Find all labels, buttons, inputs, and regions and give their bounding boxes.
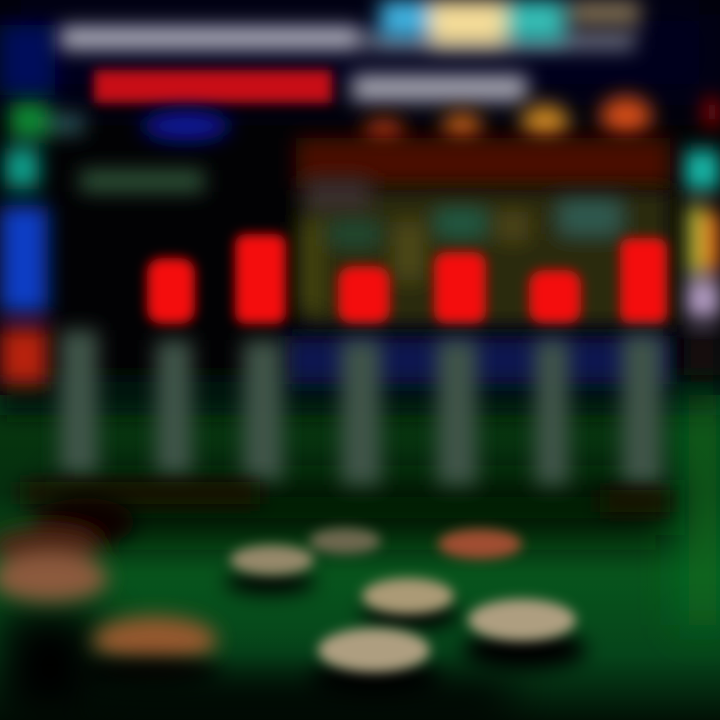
chip shadows xyxy=(80,570,587,696)
rainbow emblem xyxy=(380,0,640,46)
red banner xyxy=(94,70,332,103)
left side icons xyxy=(0,102,84,384)
subtitle xyxy=(352,75,527,101)
navy band xyxy=(285,336,670,384)
grey columns xyxy=(60,330,662,485)
red bars xyxy=(147,234,667,324)
right side icons xyxy=(684,150,720,375)
blue glow xyxy=(142,111,230,141)
chips: left pile xyxy=(0,498,217,664)
green label xyxy=(80,170,204,192)
upper muted band xyxy=(298,178,670,325)
orange lights xyxy=(364,96,720,146)
dark shadow band xyxy=(20,482,670,512)
table header band xyxy=(296,138,670,188)
chips: centre pile xyxy=(230,528,576,672)
title xyxy=(60,27,635,50)
